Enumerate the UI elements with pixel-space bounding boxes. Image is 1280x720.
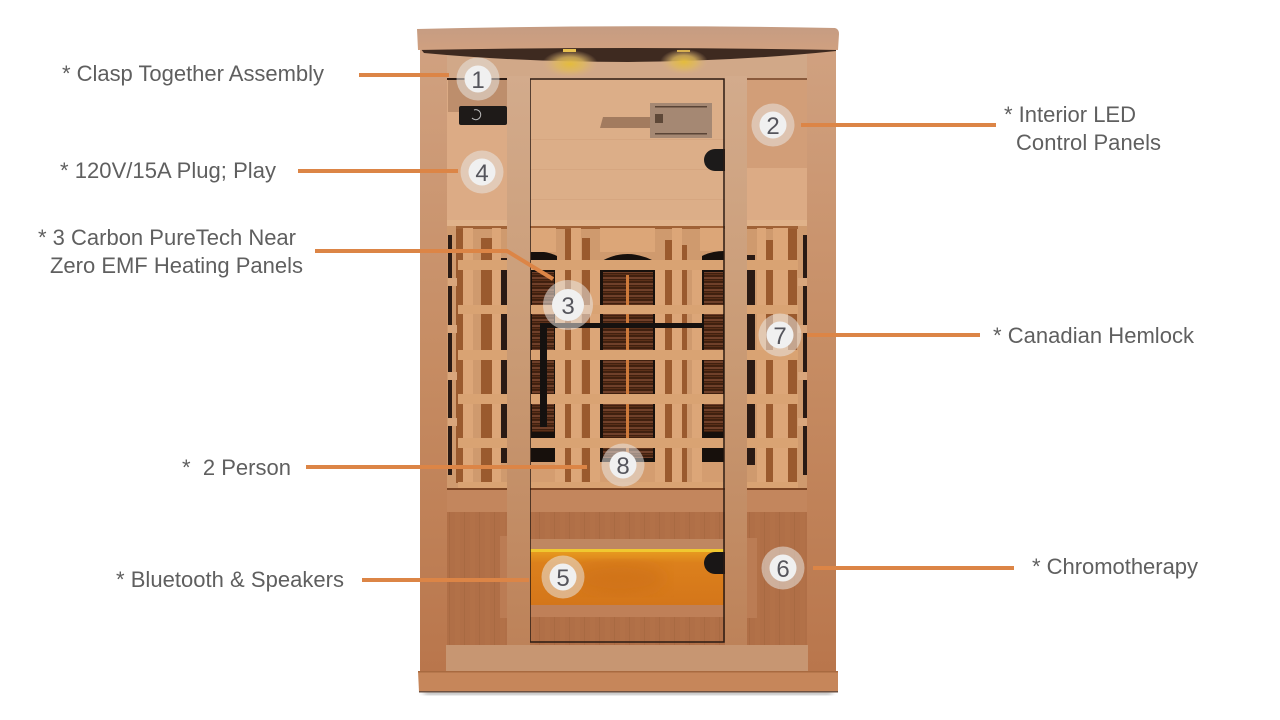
marker 2: 2 xyxy=(766,113,780,140)
horizontal wooden slats xyxy=(458,260,798,489)
label: chromotherapy: * Chromotherapy xyxy=(1032,554,1198,579)
leader line 1 xyxy=(359,73,449,77)
door handle bottom xyxy=(704,552,725,574)
label: clasp together assembly: * Clasp Together Assembly xyxy=(62,61,324,86)
heater rack area xyxy=(447,220,807,490)
outer left and right posts xyxy=(420,50,836,671)
lower wall xyxy=(447,512,807,645)
leader line 2 xyxy=(801,123,996,127)
marker 1 xyxy=(456,58,500,100)
marker 1: 1 xyxy=(471,67,485,94)
leader line 6 xyxy=(813,566,1014,570)
marker 7 xyxy=(758,314,802,356)
label: interior LED control panels xyxy=(1004,102,1161,155)
leader line 5 xyxy=(362,578,529,582)
leader line 8 xyxy=(306,465,587,469)
label: carbon heating panels: Zero EMF Heating Panels xyxy=(50,253,303,278)
label: carbon heating panels: * 3 Carbon PureTech Near xyxy=(38,225,296,250)
label: carbon heating panels xyxy=(38,225,303,278)
marker 8: 8 xyxy=(616,453,630,480)
side dark gaps xyxy=(448,235,807,475)
label: canadian hemlock: * Canadian Hemlock xyxy=(993,323,1195,348)
leader line 3 xyxy=(315,251,553,279)
door handle top xyxy=(704,149,725,171)
marker 8 xyxy=(602,444,644,486)
marker 6 xyxy=(762,546,804,590)
side ladder blocks xyxy=(448,278,807,426)
label: interior LED control panels: * Interior LED xyxy=(1004,102,1136,127)
door label plate xyxy=(600,103,712,138)
upper interior wall xyxy=(447,50,807,226)
marker 5 xyxy=(542,556,584,598)
bench xyxy=(447,488,807,512)
leader line 7 xyxy=(807,333,980,337)
marker 3: 3 xyxy=(561,293,575,320)
marker 5: 5 xyxy=(556,565,570,592)
vertical wooden slats xyxy=(456,228,797,484)
door frame lines xyxy=(530,79,724,642)
marker 4 xyxy=(460,150,504,194)
control panel on left wall xyxy=(459,106,507,125)
label: bluetooth and speakers: * Bluetooth & Speakers xyxy=(116,567,344,592)
label: interior LED control panels: Control Panels xyxy=(1016,130,1161,155)
top lights xyxy=(542,49,708,78)
marker 6: 6 xyxy=(776,556,790,583)
marker 3 xyxy=(543,280,593,330)
leader line 4 xyxy=(298,169,458,173)
top canopy xyxy=(417,26,839,62)
sauna cabin xyxy=(417,26,839,695)
heater black brackets xyxy=(540,323,703,427)
marker 7: 7 xyxy=(773,323,787,350)
lower door section with chromotherapy light xyxy=(530,512,724,642)
base shadow xyxy=(424,690,832,695)
inner door posts xyxy=(507,76,747,645)
base plinth xyxy=(418,671,838,692)
label: 2 person: * 2 Person xyxy=(182,455,291,480)
label: plug and play: * 120V/15A Plug; Play xyxy=(60,158,276,183)
marker 4: 4 xyxy=(475,160,489,187)
marker 2 xyxy=(752,104,794,146)
carbon heating panels xyxy=(531,251,724,462)
floor step xyxy=(446,645,808,671)
